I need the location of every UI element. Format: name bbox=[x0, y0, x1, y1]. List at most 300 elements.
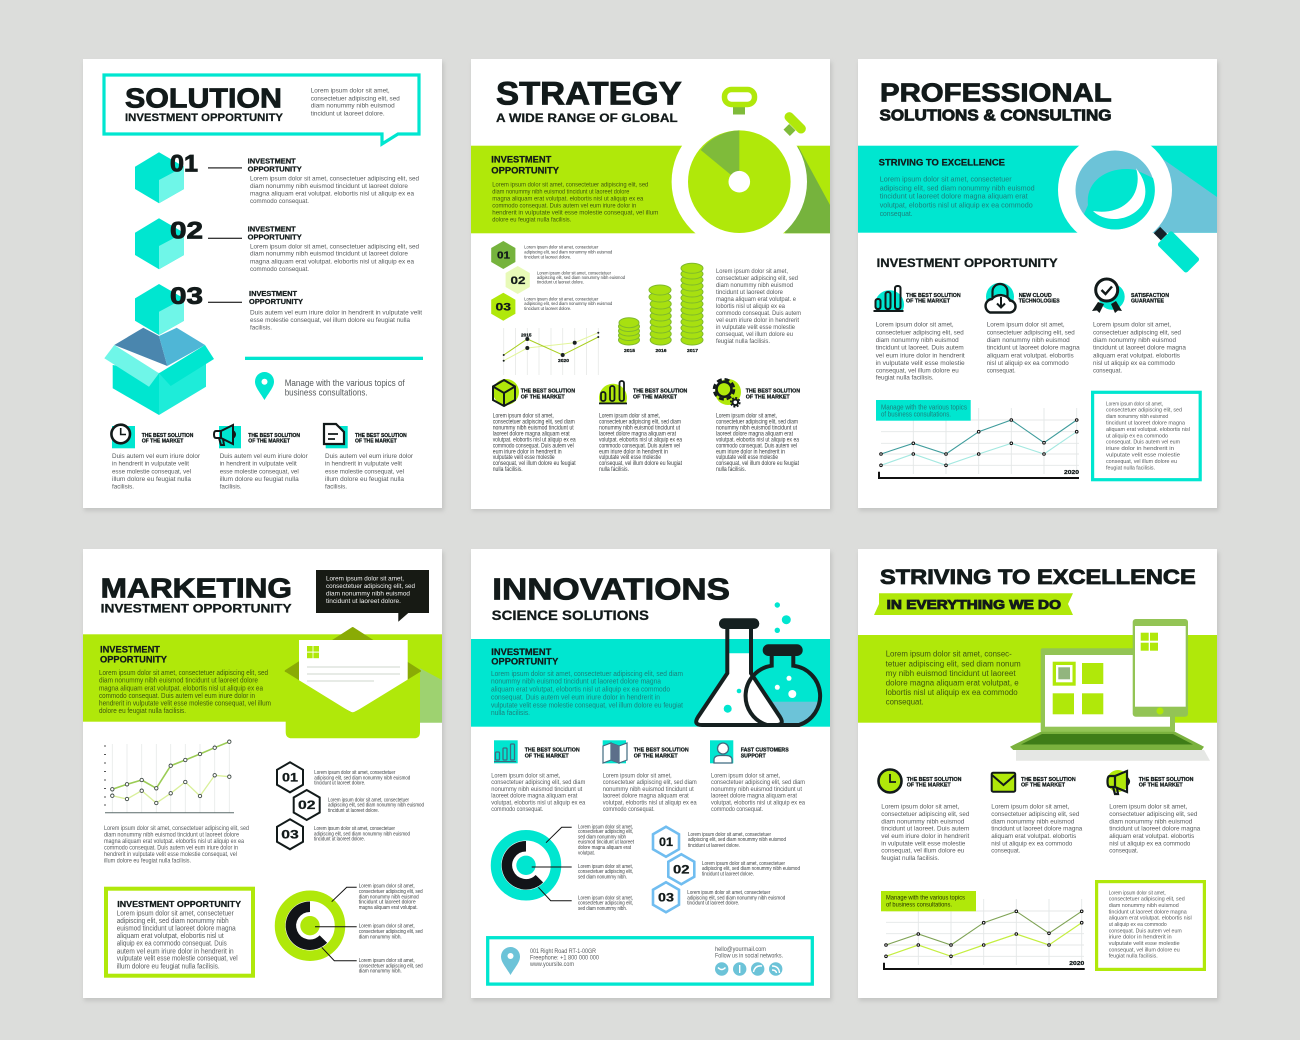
numbered list bbox=[277, 762, 424, 849]
chart caption: commodo consequat. Duis autem vel eum iriure dolor in bbox=[104, 845, 238, 851]
feature: cloud lock: consectetuer adipiscing elit, sed bbox=[987, 329, 1075, 336]
feature: megaphone: consectetuer adipiscing elit, sed bbox=[1109, 811, 1198, 818]
teal band with text: tincidunt ut laoreet dolore magna aliquam erat bbox=[880, 192, 1029, 201]
green band with text: commodo consequat. Duis autem vel eum iriure dolor in bbox=[492, 203, 637, 210]
location note: business consultations. bbox=[285, 388, 368, 399]
framed text box: aliquam erat volutpat. elobortis nisl bbox=[1106, 427, 1190, 433]
green band with text: Lorem ipsum dolor sit amet, consectetuer adipiscing elit, sed bbox=[492, 182, 649, 189]
location note: Manage with the various topics of bbox=[285, 378, 405, 389]
feature: envelope: THE BEST SOLUTION bbox=[1021, 777, 1076, 783]
coin stacks chart: 2017 bbox=[687, 348, 698, 354]
panel: marketing bbox=[83, 549, 442, 998]
green band with text bbox=[83, 634, 442, 722]
callout frame with title bbox=[104, 75, 419, 144]
side text: diam nonummy nibh euismod bbox=[716, 282, 793, 289]
numbered list: 02 bbox=[673, 864, 690, 876]
green band with text: dolore eu feugiat nulla facilisis. bbox=[492, 217, 571, 224]
line chart: of business consultations. bbox=[886, 901, 952, 908]
feature: clock: Duis autem vel eum iriure dolor bbox=[112, 453, 201, 460]
feature: envelope: consectetuer adipiscing elit, sed bbox=[991, 811, 1080, 818]
feature: guarantee badge: SATISFACTION bbox=[1131, 293, 1169, 299]
feature: cloud lock: TECHNOLOGIES bbox=[1019, 299, 1060, 305]
panel: excellence bbox=[858, 549, 1217, 998]
line chart bbox=[881, 891, 1085, 969]
numbered list: Lorem ipsum dolor sit amet, consectetuer bbox=[328, 797, 409, 803]
numbered list: tincidunt ut laoreet dolore. bbox=[328, 808, 379, 814]
numbered list: adipiscing elit, sed diam nonummy nibh euismod bbox=[314, 831, 410, 837]
feature: bars: nulla facilisis. bbox=[599, 467, 629, 473]
title bbox=[496, 75, 682, 125]
feature: guarantee badge: GUARANTEE bbox=[1131, 299, 1165, 305]
feature: bars: laoreet dolore magna aliquam erat bbox=[599, 431, 676, 437]
framed text box: feugiat nulla facilisis. bbox=[1106, 465, 1155, 471]
feature: bars: consequat, vel illum dolore eu feugiat bbox=[599, 461, 682, 467]
donut chart with labels: sed diam nonummy nibh bbox=[578, 834, 626, 840]
green band with text: INVESTMENT bbox=[100, 644, 160, 655]
framed text box: feugiat nulla facilisis. bbox=[1109, 954, 1158, 960]
black callout bbox=[316, 570, 429, 622]
title: PROFESSIONAL bbox=[880, 78, 1112, 108]
feature: megaphone: Duis autem vel eum iriure dolor bbox=[220, 453, 309, 460]
feature: cloud lock: nisl ut aliquip ex ea commodo bbox=[987, 360, 1069, 367]
illustration: open box with cube bbox=[104, 284, 214, 415]
feature: cloud lock: Lorem ipsum dolor sit amet, bbox=[987, 322, 1065, 329]
donut chart with labels: consectetuer adipiscing elit, bbox=[578, 869, 633, 875]
feature: document: THE BEST SOLUTION bbox=[355, 433, 407, 439]
teal band with text: nonummy nibh euismod tincidunt ut laoreet dolore magna bbox=[491, 679, 661, 686]
panel: strategy bbox=[471, 59, 830, 509]
donut chart with labels: tincidunt ut laoreet dolore bbox=[359, 900, 416, 906]
feature: bars: THE BEST SOLUTION bbox=[906, 293, 961, 299]
chart caption: Lorem ipsum dolor sit amet, consectetuer adipiscing elit, sed bbox=[104, 826, 249, 832]
framed text box: consequat, vel illum dolore eu bbox=[1109, 947, 1180, 953]
feature: document: esse molestie consequat, vel bbox=[325, 468, 405, 475]
feature: gears: THE BEST SOLUTION bbox=[746, 389, 800, 395]
numbered list bbox=[491, 241, 625, 321]
green band with text: INVESTMENT bbox=[491, 155, 551, 166]
framed text box: ut aliquip ex ea commodo bbox=[1109, 922, 1167, 928]
feature: cube: nulla facilisis. bbox=[493, 467, 523, 473]
donut chart with labels: sed diam nonummy nibh. bbox=[578, 906, 627, 912]
callout frame with title: INVESTMENT OPPORTUNITY bbox=[125, 112, 284, 124]
feature: bars: THE BEST SOLUTION bbox=[525, 748, 580, 754]
framed text box: Lorem ipsum dolor sit amet, bbox=[1106, 401, 1163, 407]
chart caption: illum dolore eu feugiat nulla facilisis. bbox=[104, 858, 191, 864]
contact footer: 001 Right Road RT-1-00GR bbox=[530, 949, 597, 955]
green band with text: magna aliquam erat volutpat. elobortis nisl ut aliquip ex ea bbox=[99, 685, 263, 692]
feature: guarantee badge: consequat. bbox=[1093, 368, 1122, 375]
feature: megaphone bbox=[214, 425, 309, 491]
side text: commodo consequat. Duis autem bbox=[716, 310, 801, 317]
feature: clock: diam nonummy nibh euismod bbox=[881, 818, 965, 825]
teal band with text: Lorem ipsum dolor sit amet, consectetuer bbox=[880, 175, 1012, 184]
line chart: of business consultations. bbox=[881, 412, 951, 419]
donut chart with labels: diam nonummy nibh euismod bbox=[359, 894, 419, 900]
feature: megaphone: illum dolore eu feugiat nulla bbox=[220, 476, 299, 483]
step 01: commodo consequat. bbox=[250, 198, 309, 205]
feature: megaphone: THE BEST SOLUTION bbox=[1139, 777, 1193, 783]
teal band with text: aliquam erat volutpat, elobortis nisl ut aliquip ex ea commodo bbox=[491, 687, 670, 694]
coin stacks chart bbox=[618, 263, 703, 354]
framed text box: illum dolore eu feugiat nulla facilisis. bbox=[117, 963, 220, 970]
feature: clock bbox=[111, 425, 201, 491]
feature: clock: Lorem ipsum dolor sit amet, bbox=[881, 804, 959, 811]
numbered list: tincidunt ut laoreet dolore. bbox=[524, 254, 571, 260]
feature: customer support: consectetuer adipiscing elit, sed diam bbox=[711, 780, 805, 786]
framed text box bbox=[1097, 882, 1204, 969]
step 01: 01 bbox=[170, 151, 198, 178]
framed text box: vulputate velit esse molestie bbox=[1109, 941, 1180, 947]
feature: cube: consequat, vel illum dolore eu feugiat bbox=[493, 461, 576, 467]
numbered list: tincidunt ut laoreet dolore. bbox=[524, 306, 571, 312]
feature: bars: consectetuer adipiscing elit, sed diam bbox=[599, 420, 681, 426]
contact footer: Follow us in social networks. bbox=[715, 954, 783, 960]
feature: envelope: nisl ut aliquip ex ea commodo bbox=[991, 840, 1073, 847]
line chart: 2020 bbox=[1064, 470, 1079, 476]
black callout: diam nonummy nibh euismod bbox=[326, 591, 410, 598]
teal band with text: Lorem ipsum dolor sit amet, consectetuer adipiscing elit, sed diam bbox=[491, 671, 683, 678]
step 03 text: INVESTMENT bbox=[249, 291, 298, 298]
teal band with text: consequat. Duis autem vel eum iriure dolor in hendrerit in bbox=[491, 694, 660, 701]
framed text box: iriure dolor in hendrerit in bbox=[1106, 446, 1174, 452]
side text bbox=[716, 268, 801, 345]
donut chart with labels: Lorem ipsum dolor sit amet, bbox=[359, 883, 415, 889]
framed text box: adipiscing elit, sed diam nonummy nibh bbox=[117, 918, 229, 925]
step 02: diam nonummy nibh euismod tincidunt ut laoreet dolore bbox=[250, 251, 408, 258]
title: INVESTMENT OPPORTUNITY bbox=[101, 604, 292, 616]
green band with text bbox=[471, 146, 830, 233]
feature: document: facilisis. bbox=[325, 484, 347, 491]
callout frame with title: tincidunt ut laoreet dolore. bbox=[311, 110, 385, 117]
framed text box: vulputate velit esse molestie consequat, vel bbox=[117, 956, 238, 963]
feature: bars: consectetuer adipiscing elit, sed diam bbox=[491, 780, 585, 786]
side text: lobortis nisl ut aliquip ex ea bbox=[716, 303, 785, 310]
feature: megaphone: nisl ut aliquip ex ea commodo bbox=[1109, 840, 1191, 847]
teal band with text: nulla facilisis. bbox=[491, 710, 530, 717]
feature: cube: Lorem ipsum dolor sit amet, bbox=[493, 414, 554, 420]
feature: document bbox=[324, 424, 414, 491]
side text: feugiat nulla facilisis. bbox=[716, 338, 770, 345]
title bbox=[101, 572, 292, 616]
feature: megaphone: facilisis. bbox=[220, 484, 242, 491]
line chart bbox=[876, 400, 1079, 478]
feature: map: laoreet dolore magna aliquam erat bbox=[603, 794, 689, 800]
feature: bars: tincidunt ut laoreet. Duis autem bbox=[876, 345, 964, 352]
feature: gears: Lorem ipsum dolor sit amet, bbox=[716, 414, 777, 420]
feature: gears: consectetuer adipiscing elit, sed diam bbox=[716, 420, 798, 426]
feature: bars: OF THE MARKET bbox=[906, 299, 951, 305]
feature: clock: OF THE MARKET bbox=[907, 783, 951, 789]
donut chart with labels: diam nonummy nibh. bbox=[359, 934, 402, 940]
title bbox=[880, 78, 1112, 125]
numbered list: 03 bbox=[496, 302, 511, 314]
feature: megaphone: esse molestie consequat, vel bbox=[220, 468, 299, 475]
framed text box: consequat. Duis autem vel eum bbox=[1109, 928, 1182, 934]
feature: megaphone bbox=[1107, 770, 1201, 855]
icon: stopwatch bbox=[672, 90, 830, 249]
donut chart with labels: consectetuer adipiscing elit, sed bbox=[359, 963, 423, 969]
feature: bars: nonummy nibh euismod tincidunt ut bbox=[491, 787, 583, 793]
feature: gears: nulla facilisis. bbox=[716, 467, 746, 473]
icon: laptop and tablet bbox=[1010, 619, 1210, 761]
feature: bars: volutpat. elobortis nisl ut aliquip ex ea bbox=[599, 437, 683, 443]
contact footer: www.yoursite.com bbox=[529, 962, 574, 968]
contact footer bbox=[488, 938, 812, 984]
black callout: consectetuer adipiscing elit, sed bbox=[326, 583, 415, 590]
feature: clock: consectetuer adipiscing elit, sed bbox=[881, 811, 970, 818]
feature: bars: vulputate velit esse molestie bbox=[599, 455, 662, 461]
feature: cloud lock: consequat. bbox=[987, 368, 1016, 375]
line chart: Manage with the various topics bbox=[881, 404, 967, 411]
numbered list: adipiscing elit, sed diam nonummy nibh euismod bbox=[524, 301, 613, 307]
framed text box: vulputate velit esse molestie bbox=[1106, 452, 1180, 458]
feature: bars: volutpat, elobortis nisl ut aliquip ex ea bbox=[491, 800, 586, 806]
donut chart with labels: consectetuer adipiscing elit, bbox=[578, 901, 633, 907]
framed text box: tincidunt ut laoreet dolore magna bbox=[1109, 909, 1188, 915]
side text: consequat, vel illum dolore eu bbox=[716, 331, 793, 338]
feature: cloud lock: tincidunt ut laoreet dolore magna bbox=[987, 345, 1080, 352]
feature: clock: illum dolore eu feugiat nulla bbox=[112, 476, 191, 483]
step 01: Lorem ipsum dolor sit amet, consectetuer adipiscing elit, sed bbox=[250, 175, 419, 182]
feature: bars: consequat, vel illum dolore eu bbox=[876, 368, 959, 375]
donut chart with labels: consectetuer adipiscing elit, bbox=[578, 829, 633, 835]
framed text box: aliquam erat volutpat, elobortis nisl ut bbox=[117, 933, 224, 940]
numbered list: Lorem ipsum dolor sit amet, consectetuer bbox=[702, 861, 785, 867]
numbered list: adipiscing elit, sed diam nonummy nibh euismod bbox=[687, 895, 785, 901]
donut chart with labels: consectetuer adipiscing elit, sed bbox=[359, 929, 423, 935]
teal band with text: consequat. bbox=[880, 209, 913, 218]
feature: envelope: tincidunt ut laoreet dolore magna bbox=[991, 826, 1083, 833]
feature: clock: tincidunt ut laoreet. Duis autem bbox=[881, 826, 969, 833]
feature: customer support: nonummy nibh euismod tincidunt ut bbox=[711, 787, 802, 793]
step 01: magna aliquam erat volutpat. elobortis nisl ut aliquip ex ea bbox=[250, 191, 414, 198]
icon: flasks bbox=[696, 602, 820, 726]
feature: gears: commodo consequat. Duis autem vel bbox=[716, 443, 797, 449]
feature: bars: eum iriure dolor in hendrerit in bbox=[599, 449, 668, 455]
feature: megaphone: aliquam erat volutpat. elobortis bbox=[1109, 833, 1195, 840]
feature: envelope: OF THE MARKET bbox=[1021, 783, 1066, 789]
numbered list: adipiscing elit, sed diam nonummy nibh euismod bbox=[524, 249, 613, 255]
step 02: OPPORTUNITY bbox=[248, 235, 302, 242]
feature: cloud lock: aliquam erat volutpat. elobortis bbox=[987, 352, 1074, 359]
feature: bars: laoreet dolore magna aliquam erat bbox=[491, 794, 578, 800]
feature: map: nonummy nibh euismod tincidunt ut bbox=[603, 787, 694, 793]
feature: cube: eum iriure dolor in hendrerit in bbox=[493, 449, 562, 455]
heading: INVESTMENT OPPORTUNITY bbox=[877, 258, 1058, 270]
donut chart with labels: diam nonummy nibh. bbox=[359, 969, 402, 975]
green band with text: dolore eu feugiat nulla facilisis. bbox=[99, 708, 186, 715]
feature: guarantee badge: diam nonummy nibh euismod bbox=[1093, 337, 1176, 344]
feature: customer support: laoreet dolore magna aliquam erat bbox=[711, 794, 797, 800]
feature: bars: OF THE MARKET bbox=[525, 753, 569, 759]
donut chart with labels: Lorem ipsum dolor sit amet, bbox=[578, 864, 633, 870]
chart caption: hendrerit in vulputate velit esse molestie consequat, vel bbox=[104, 852, 237, 858]
feature: clock: in hendrerit in vulputate velit bbox=[112, 461, 189, 468]
teal band with text bbox=[471, 639, 830, 727]
feature: cube: volutpat. elobortis nisl ut aliquip ex ea bbox=[493, 437, 576, 443]
feature: megaphone: in hendrerit in vulputate velit bbox=[220, 461, 297, 468]
framed text box: consectetuer adipiscing elit, sed bbox=[1109, 897, 1185, 903]
donut chart with labels: Lorem ipsum dolor sit amet, bbox=[578, 896, 633, 902]
title: STRIVING TO EXCELLENCE bbox=[880, 565, 1196, 589]
framed text box: Lorem ipsum dolor sit amet, bbox=[1109, 890, 1166, 896]
feature: bars: Lorem ipsum dolor sit amet, bbox=[491, 774, 561, 780]
numbered list: 01 bbox=[659, 837, 674, 849]
callout frame with title: diam nonummy nibh euismod bbox=[311, 103, 395, 110]
feature: bars: diam nonummy nibh euismod bbox=[876, 337, 959, 344]
green band with text bbox=[858, 635, 1217, 723]
feature: megaphone: OF THE MARKET bbox=[248, 438, 291, 444]
feature: bars bbox=[491, 740, 586, 813]
small line chart: 2015 bbox=[521, 332, 532, 338]
title: SCIENCE SOLUTIONS bbox=[492, 607, 649, 623]
teal band with text: vulputate velit esse molestie consequat, vel illum dolore eu feugiat bbox=[491, 702, 683, 709]
numbered list: Lorem ipsum dolor sit amet, consectetuer bbox=[688, 832, 771, 838]
feature: cube: nonummy nibh euismod tincidunt ut bbox=[493, 425, 574, 431]
black callout: tincidunt ut laoreet dolore. bbox=[326, 598, 401, 605]
step 02: commodo consequat. bbox=[250, 266, 309, 273]
coin stacks chart: 2016 bbox=[656, 348, 667, 354]
step 01: INVESTMENT bbox=[248, 158, 296, 165]
green band with text: Lorem ipsum dolor sit amet, consectetuer adipiscing elit, sed bbox=[99, 670, 268, 677]
contact footer: hello@yourmail.com bbox=[715, 947, 766, 953]
feature: bars: consectetuer adipiscing elit, sed bbox=[876, 329, 964, 336]
feature: gears: nonummy nibh euismod tincidunt ut bbox=[716, 425, 797, 431]
feature: envelope: Lorem ipsum dolor sit amet, bbox=[991, 804, 1069, 811]
framed text box: diam nonummy nibh euismod bbox=[1109, 903, 1179, 909]
framed text box: consectetuer adipiscing elit, sed bbox=[1106, 408, 1182, 414]
feature: cloud lock bbox=[986, 283, 1080, 375]
feature: gears: laoreet dolore magna aliquam erat bbox=[716, 431, 793, 437]
step 01 bbox=[135, 151, 419, 205]
feature: envelope: consequat. bbox=[991, 848, 1020, 855]
green band with text: hendrerit in vulputate velit esse molestie consequat, vel illum bbox=[99, 701, 271, 708]
chart caption: magna aliquam erat volutpat. elobortis nisl ut aliquip ex ea bbox=[104, 839, 245, 845]
step 03 text: 03 bbox=[170, 283, 203, 310]
feature: bars: nonummy nibh euismod tincidunt ut bbox=[599, 425, 680, 431]
feature: clock: OF THE MARKET bbox=[142, 438, 184, 444]
teal band with text: INVESTMENT bbox=[491, 647, 551, 658]
numbered list: Lorem ipsum dolor sit amet, consectetuer bbox=[524, 297, 599, 303]
panel: professional bbox=[858, 59, 1217, 508]
feature: customer support: FAST CUSTOMERS bbox=[741, 748, 789, 754]
feature: megaphone: diam nonummy nibh euismod bbox=[1109, 818, 1193, 825]
feature: envelope: aliquam erat volutpat. elobortis bbox=[991, 833, 1077, 840]
chart caption: diam nonummy nibh euismod tincidunt ut laoreet dolore bbox=[104, 833, 240, 839]
coin stacks chart: 2015 bbox=[624, 348, 635, 354]
donut chart with labels: magna aliquam erat volutpat. bbox=[359, 905, 418, 911]
feature: bars bbox=[599, 381, 687, 473]
feature: megaphone: THE BEST SOLUTION bbox=[248, 433, 300, 439]
feature: clock: vel eum iriure dolor in hendrerit bbox=[881, 833, 969, 840]
green band with text: consequat. bbox=[886, 697, 924, 706]
feature: megaphone: OF THE MARKET bbox=[1139, 783, 1183, 789]
feature: cube: THE BEST SOLUTION bbox=[521, 389, 575, 395]
teal band with text: OPPORTUNITY bbox=[491, 657, 559, 668]
line chart: Manage with the various topics bbox=[886, 894, 966, 901]
donut chart with labels bbox=[280, 883, 423, 975]
feature: bars: Lorem ipsum dolor sit amet, bbox=[599, 414, 660, 420]
feature: customer support: Lorem ipsum dolor sit amet, bbox=[711, 774, 780, 780]
side text: magna aliquam erat volutpat. e bbox=[716, 296, 796, 303]
framed text box bbox=[1093, 392, 1200, 480]
feature: clock: facilisis. bbox=[112, 484, 134, 491]
contact footer: Freephone: +1 800 000 000 bbox=[530, 956, 600, 962]
green band with text: diam nonummy nibh euismod tincidunt ut laoreet dolore bbox=[492, 188, 630, 195]
feature: map: Lorem ipsum dolor sit amet, bbox=[603, 774, 672, 780]
feature: cube: OF THE MARKET bbox=[521, 394, 565, 400]
feature: clock: feugiat nulla facilisis. bbox=[881, 855, 939, 862]
side text: consectetuer adipiscing elit, sed bbox=[716, 275, 798, 282]
teal band with text: STRIVING TO EXCELLENCE bbox=[879, 157, 1005, 167]
numbered list: 01 bbox=[282, 772, 299, 784]
feature: bars: vel eum iriure dolor in hendrerit bbox=[876, 352, 965, 359]
green band with text: lobortis nisl ut aliquip ex ea commodo bbox=[886, 688, 1018, 697]
feature: map: volutpat, elobortis nisl ut aliquip ex ea bbox=[603, 800, 697, 806]
ribbon subtitle: IN EVERYTHING WE DO bbox=[887, 598, 1061, 612]
framed text box: aliquip ex ea commodo consequat. Duis bbox=[117, 941, 227, 948]
callout frame with title: Lorem ipsum dolor sit amet, bbox=[311, 88, 390, 95]
donut chart with labels: Lorem ipsum dolor sit amet, bbox=[359, 958, 415, 964]
side text: tincidunt ut laoreet dolore bbox=[716, 289, 783, 296]
feature: bars: commodo consequat. bbox=[491, 807, 544, 813]
step 03 text: esse molestie consequat, vel illum dolore eu feugiat nulla bbox=[250, 317, 410, 324]
donut chart with labels: euismod tincidunt ut laoreet bbox=[578, 839, 634, 845]
step 02: Lorem ipsum dolor sit amet, consectetuer adipiscing elit, sed bbox=[250, 243, 419, 250]
side text: vel eum iriure dolor in hendrerit bbox=[716, 317, 799, 324]
numbered list: adipiscing elit, sed diam nonummy nibh euismod bbox=[702, 866, 800, 872]
green band with text: magna aliquam erat volutpat. elobortis nisl ut aliquip ex ea bbox=[492, 195, 644, 202]
feature: envelope bbox=[991, 773, 1083, 855]
title: A WIDE RANGE OF GLOBAL bbox=[496, 113, 678, 125]
feature: bars: commodo consequat. Duis autem vel bbox=[599, 443, 680, 449]
step 02: 02 bbox=[170, 217, 203, 244]
donut chart with labels: dolore magna aliquam erat bbox=[578, 845, 631, 851]
numbered list: tincidunt ut laoreet dolore. bbox=[688, 843, 740, 849]
feature: cube: consectetuer adipiscing elit, sed diam bbox=[493, 420, 575, 426]
step 03 text: facilisis. bbox=[250, 325, 272, 332]
side text: Lorem ipsum dolor sit amet, bbox=[716, 268, 788, 275]
framed text box: ut aliquip ex ea commodo bbox=[1106, 433, 1168, 439]
callout frame with title: consectetuer adipiscing elit, sed bbox=[311, 95, 400, 102]
donut chart with labels: Lorem ipsum dolor sit amet, bbox=[578, 824, 633, 830]
feature: document: in hendrerit in vulputate velit bbox=[325, 461, 402, 468]
feature: customer support bbox=[710, 740, 806, 813]
green band with text: tetuer adipiscing elit, sed diam nonum bbox=[886, 659, 1021, 668]
framed text box: consequat. Duis autem vel eum bbox=[1106, 440, 1180, 446]
framed text box: consequat, vel illum dolore eu bbox=[1106, 459, 1177, 465]
feature: document: OF THE MARKET bbox=[355, 438, 398, 444]
feature: bars: OF THE MARKET bbox=[633, 394, 678, 400]
donut chart with labels: sed diam nonummy nibh. bbox=[578, 874, 627, 880]
step 02 bbox=[135, 217, 419, 273]
feature: gears: consequat, vel illum dolore eu feugiat bbox=[716, 461, 799, 467]
feature: guarantee badge bbox=[1092, 279, 1186, 375]
feature: clock: in vulputate velit esse molestie bbox=[881, 840, 966, 847]
feature: bars: in vulputate velit esse molestie bbox=[876, 360, 965, 367]
feature: guarantee badge: nisl ut aliquip ex ea commodo bbox=[1093, 360, 1175, 367]
step 02: magna aliquam erat volutpat. elobortis nisl ut aliquip ex ea bbox=[250, 258, 414, 265]
callout frame with title: SOLUTION bbox=[125, 83, 282, 114]
step 03 text bbox=[170, 283, 422, 332]
feature: clock: esse molestie consequat, vel bbox=[112, 468, 192, 475]
numbered list: tincidunt ut laoreet dolore. bbox=[702, 872, 754, 878]
feature: cloud lock: NEW CLOUD bbox=[1019, 293, 1052, 299]
feature: gears: eum iriure dolor in hendrerit in bbox=[716, 449, 785, 455]
teal band with text: volutpat, elobortis nisl ut aliquip ex ea commodo bbox=[880, 200, 1033, 209]
feature: map bbox=[603, 740, 697, 813]
panel: innovations bbox=[471, 549, 830, 998]
